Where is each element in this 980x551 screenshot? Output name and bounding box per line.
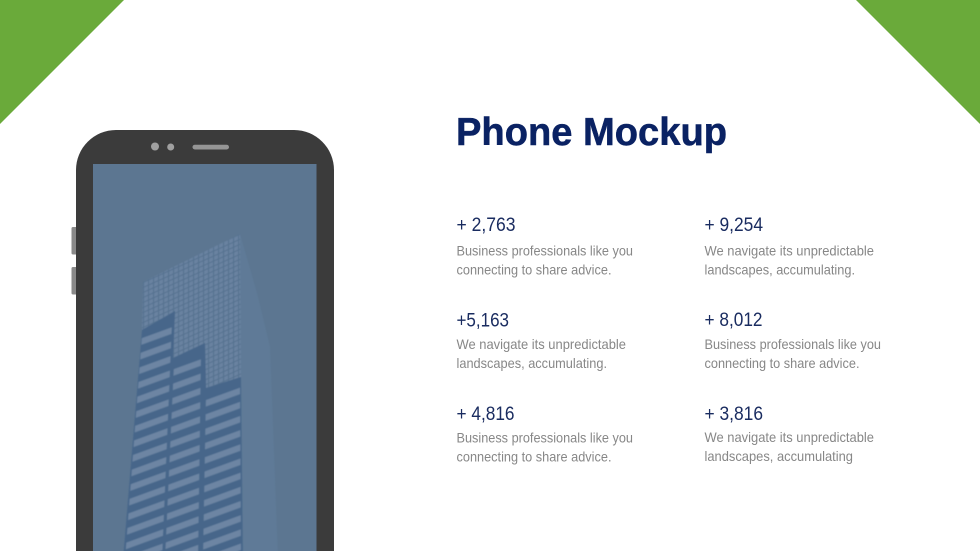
stat: 3,816: + 3,816 (704, 404, 763, 425)
stat: 4,816: + 4,816 (456, 404, 514, 425)
phone side buttons (72, 227, 78, 294)
stat: 9,254 (704, 215, 874, 278)
stat: 4,816 (456, 404, 633, 464)
stat: 2,763: connecting to share advice. (456, 262, 612, 278)
stat: 2,763 (456, 215, 633, 278)
phone body (76, 130, 334, 551)
stat: 4,816: Business professionals like you (456, 430, 633, 446)
phone mockup (72, 130, 334, 551)
title: Phone Mockup (456, 111, 727, 154)
stat: 4,816: connecting to share advice. (456, 448, 612, 464)
stat: 9,254: landscapes, accumulating. (704, 262, 855, 278)
stat: 5,163: landscapes, accumulating. (456, 355, 607, 371)
stat: 8,012: connecting to share advice. (704, 355, 860, 371)
phone camera dots (151, 142, 174, 150)
phone screen with building photo (93, 164, 316, 551)
stat: 2,763: Business professionals like you (456, 242, 633, 258)
stat: 3,816: landscapes, accumulating (704, 448, 853, 464)
stat: 2,763: + 2,763 (456, 215, 516, 236)
stat: 3,816 (704, 404, 874, 464)
stat: 5,163: We navigate its unpredictable (456, 336, 626, 352)
corner triangle: top left (0, 0, 124, 124)
corner triangle: top right (856, 0, 980, 124)
stat: 3,816: We navigate its unpredictable (704, 429, 874, 445)
stat: 5,163 (456, 310, 626, 371)
phone speaker (192, 145, 229, 150)
stat: 8,012: Business professionals like you (704, 336, 881, 352)
stat: 8,012 (704, 310, 881, 371)
stat: 9,254: + 9,254 (704, 215, 763, 236)
stat: 5,163: +5,163 (456, 310, 509, 332)
stat: 9,254: We navigate its unpredictable (704, 242, 874, 258)
stat: 8,012: + 8,012 (704, 310, 762, 331)
